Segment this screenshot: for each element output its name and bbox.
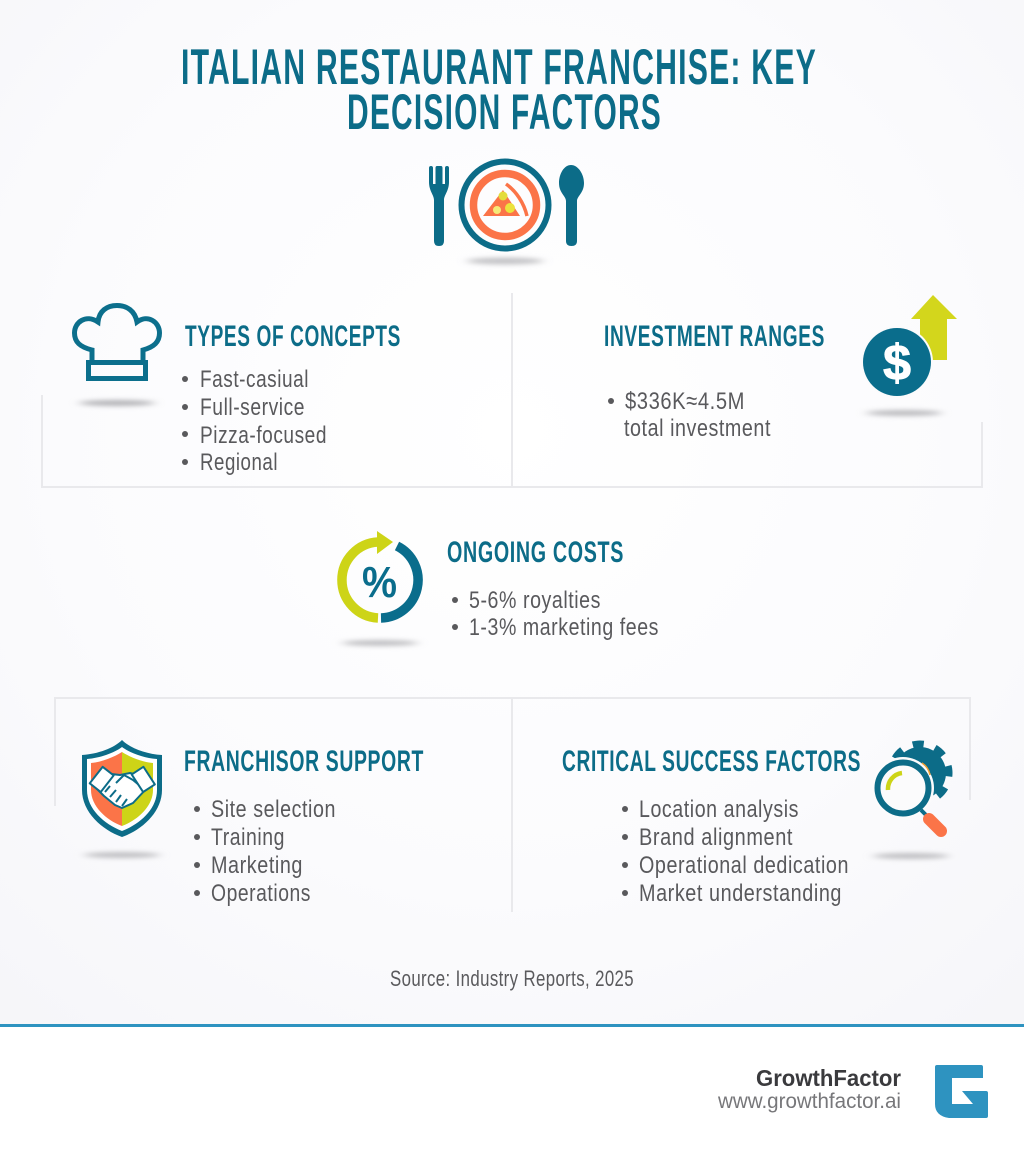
list bbox=[608, 388, 771, 442]
panel: franchisor support bbox=[55, 698, 512, 912]
list: Brand alignment bbox=[639, 824, 793, 851]
icon: fork bbox=[429, 166, 449, 246]
icon: chef hat bbox=[74, 306, 160, 378]
list bbox=[622, 796, 849, 907]
list: total investment bbox=[624, 415, 771, 442]
title: DECISION FACTORS bbox=[347, 84, 662, 140]
source note: Source: Industry Reports, 2025 bbox=[390, 966, 634, 991]
list: Site selection bbox=[211, 796, 336, 823]
icon: dollar coin with up arrow: $ bbox=[883, 335, 911, 391]
heading: ONGOING COSTS bbox=[447, 536, 624, 569]
list: Location analysis bbox=[639, 796, 799, 823]
icon: spoon bbox=[559, 165, 584, 246]
logo bbox=[935, 1065, 988, 1118]
heading: TYPES OF CONCEPTS bbox=[185, 320, 401, 353]
icon: plate bbox=[462, 162, 548, 248]
heading: CRITICAL SUCCESS FACTORS bbox=[562, 745, 861, 778]
panel: ongoing costs bbox=[342, 531, 659, 646]
list: Marketing bbox=[211, 852, 303, 879]
list: Operations bbox=[211, 880, 311, 907]
list: Operational dedication bbox=[639, 852, 849, 879]
panel: critical success factors bbox=[512, 698, 970, 907]
brand name: GrowthFactor bbox=[756, 1065, 901, 1091]
list: Full-service bbox=[200, 394, 305, 421]
icon: percent cycle: % bbox=[362, 558, 397, 607]
list: 1-3% marketing fees bbox=[469, 614, 659, 641]
icon: pizza slice bbox=[483, 184, 527, 216]
website: www.growthfactor.ai bbox=[717, 1090, 901, 1113]
list bbox=[182, 366, 327, 476]
heading: FRANCHISOR SUPPORT bbox=[184, 745, 424, 778]
panel: investment ranges bbox=[512, 295, 982, 487]
list: $336K≈4.5M bbox=[625, 388, 745, 415]
list: 5-6% royalties bbox=[469, 587, 601, 614]
list: Regional bbox=[200, 449, 278, 476]
list: Fast-casiual bbox=[200, 366, 309, 393]
list bbox=[194, 796, 336, 907]
icon: shield with handshake bbox=[82, 740, 162, 837]
icon: gear and magnifier bbox=[872, 742, 951, 831]
list bbox=[452, 587, 659, 641]
heading: INVESTMENT RANGES bbox=[604, 320, 825, 353]
list: Training bbox=[211, 824, 285, 851]
footer bbox=[0, 1024, 1024, 1154]
icon: plate with pizza, fork and spoon bbox=[429, 162, 584, 264]
icon: dollar coin with up arrow bbox=[861, 295, 957, 398]
list: Pizza-focused bbox=[200, 422, 327, 449]
list: Market understanding bbox=[639, 880, 842, 907]
title bbox=[181, 39, 817, 140]
icon: percent cycle bbox=[342, 531, 418, 618]
panel: types of concepts bbox=[42, 293, 512, 487]
